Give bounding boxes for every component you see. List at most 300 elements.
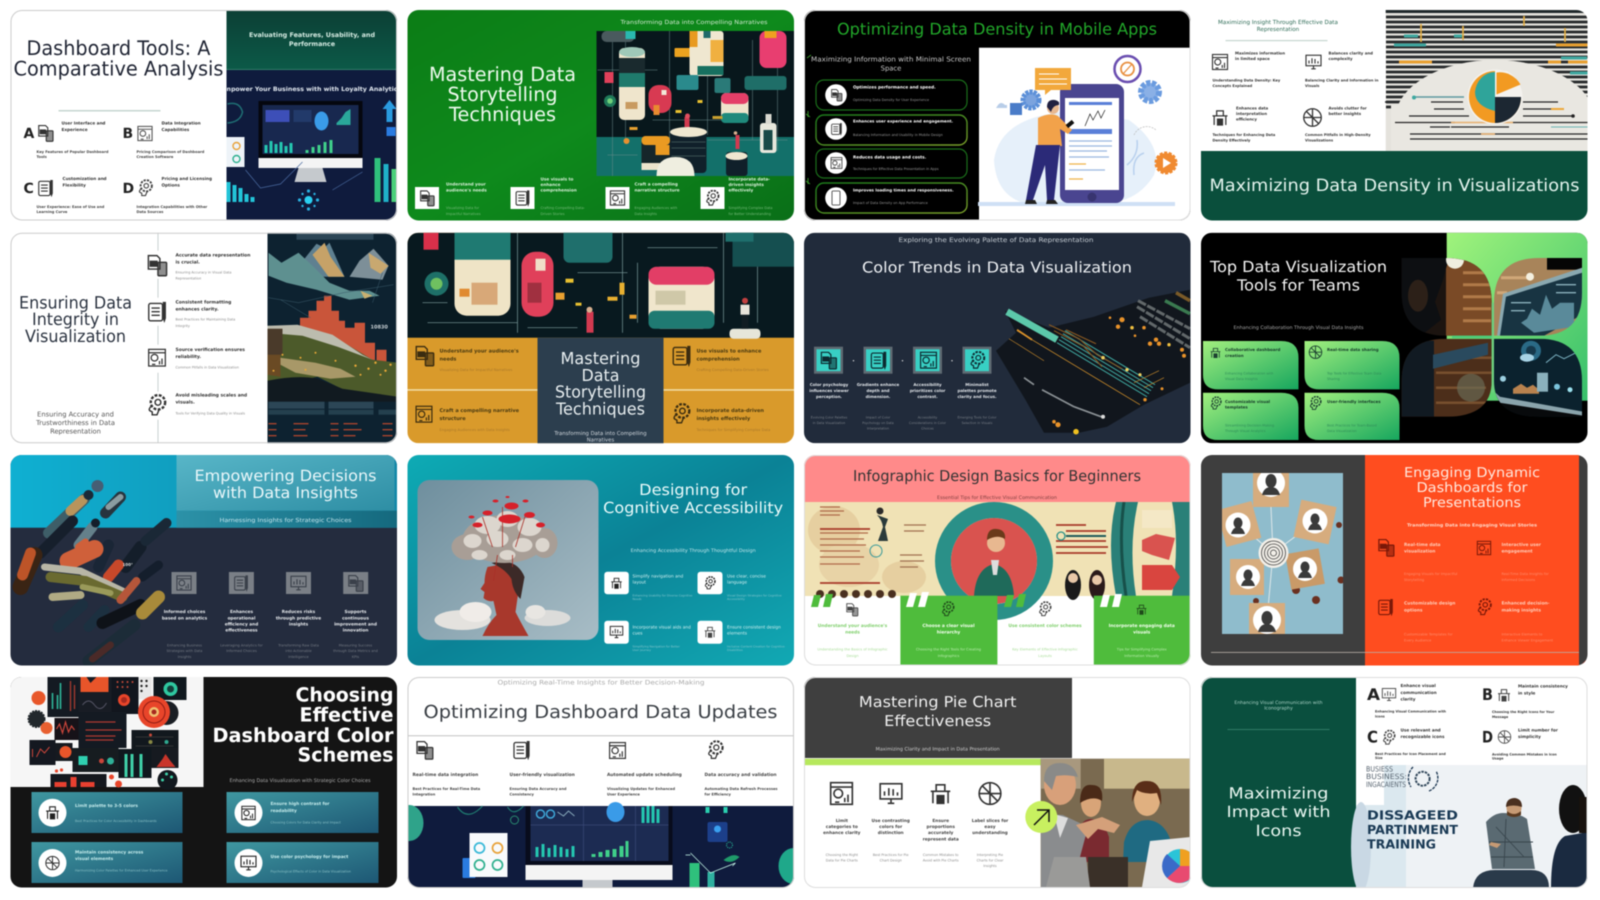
features grid: communication [1400, 690, 1437, 695]
pie chart tips: Charts for Clear [977, 858, 1004, 862]
title: Techniques [448, 103, 556, 126]
four decisions: efficiency and [225, 622, 258, 628]
pie chart tips: distinction [878, 830, 904, 836]
image: terrain data visualization: 10830 [370, 325, 388, 331]
left panel: Icons [1256, 822, 1302, 840]
feature row: Use visuals to [540, 176, 574, 182]
list of benefits [816, 80, 967, 213]
list of benefits: Optimizing Data Density for User Experience [853, 98, 929, 102]
four color tips: Best Practices for Color Accessibility in Dashboards [75, 819, 157, 823]
features grid: complexity [1328, 56, 1353, 61]
features grid: Data Integration [162, 120, 201, 126]
title: Optimizing Data Density in Mobile Apps [837, 20, 1157, 38]
process steps: for Efficiency [704, 792, 732, 796]
pie chart tips: categories to [826, 824, 858, 830]
four feature tiles: Crafting Compelling Data-Driven Stories [696, 368, 769, 372]
four feature tiles: Use visuals to enhance [696, 349, 762, 355]
title panel [176, 455, 398, 528]
features grid: B [122, 126, 133, 142]
four color tips: Use color psychology for impact [270, 854, 348, 860]
panel: Dashboard Color Schemes card [10, 677, 397, 888]
accessibility tips: Inclusive Content Creation for Cognitive [727, 644, 785, 648]
features grid: Customization and [62, 176, 107, 181]
process steps: User-friendly visualization [510, 772, 575, 778]
image: retro infographic [804, 502, 1191, 612]
pie chart tips: understanding [972, 830, 1008, 836]
image: dark ribbon chart [996, 290, 1190, 434]
four trends: Gradients enhance [857, 382, 900, 387]
pie chart tips: Choosing the Right [826, 853, 859, 857]
four decisions: innovation [343, 628, 368, 634]
subtitle: Maximizing Information with Minimal Screen [811, 56, 971, 64]
tool cards: Customizable visual [1225, 399, 1271, 404]
pie chart tips: Ensure [932, 818, 949, 824]
subtitle [35, 411, 115, 436]
left panel: Impact with [1226, 803, 1330, 821]
title: Top Data Visualization [1209, 258, 1387, 276]
four decisions: insights [289, 622, 309, 628]
features grid: Pricing and Licensing [162, 176, 212, 181]
panel: Cognitive Accessibility card [408, 455, 794, 666]
feature row: driven insights [728, 182, 764, 187]
tool cards: Streamlining Decision-Making [1225, 424, 1274, 428]
feature grid: engagement [1502, 548, 1533, 554]
panel: Mastering Data Storytelling green card [408, 10, 794, 220]
four color tips: readability [270, 808, 297, 814]
feature grid: Customizable Templates for [1404, 632, 1453, 636]
four trends: contrast. [917, 394, 938, 399]
pie chart tips: Use contrasting [872, 818, 910, 824]
process steps: Consistency [510, 792, 535, 796]
features grid: simplicity [1518, 734, 1541, 739]
accessibility tips: Incorporate visual aids and [632, 624, 691, 630]
title block: Mastering [560, 349, 640, 368]
process steps: Automating Data Refresh Processes [704, 787, 778, 791]
checklist: enhances clarity. [176, 307, 219, 313]
arrow badge [1025, 801, 1057, 833]
subtitle: Exploring the Evolving Palette of Data Representation [898, 237, 1094, 244]
features grid: Experience [62, 127, 88, 132]
subtitle: Maximizing Insight Through Effective Data [1218, 19, 1338, 26]
list of benefits: Impact of Data Density on App Performance [853, 201, 928, 205]
four trends: Accessibility [918, 416, 937, 420]
four decisions: effectiveness [225, 628, 258, 634]
four color tips: Choosing Colors for Data Clarity and Impact [270, 820, 341, 824]
four decisions: Informed choices [164, 609, 206, 615]
four decisions: Transforming Raw Data [277, 644, 319, 648]
four decisions: KPIs [352, 655, 359, 659]
feature row: for Better Understanding [728, 212, 771, 216]
features grid: D [1482, 728, 1493, 746]
features grid: Visualizations [1305, 138, 1333, 142]
four tips with quote marks: Understanding the Basics of Infographic [817, 648, 888, 652]
pie chart tips: Insights [983, 864, 997, 868]
panel: Maximizing Impact with Icons card [1201, 677, 1588, 892]
left panel [1201, 677, 1356, 888]
four decisions: Measuring Success [339, 644, 372, 648]
features grid: in style [1518, 690, 1536, 696]
features grid: Avoids clutter for [1328, 106, 1367, 110]
four trends: Evolving Color Palettes [811, 416, 848, 420]
tool cards: Through Visual Analytics [1224, 429, 1266, 433]
process steps: Ensuring Data Accuracy and [510, 787, 567, 791]
four trends: in Data Visualization [813, 421, 845, 425]
accessibility tips: User Journey [632, 648, 651, 652]
title [1404, 465, 1540, 511]
image: cloud head [418, 480, 598, 640]
image: dashboard monitor: npower Your Business with with Loyalty Analytic [226, 86, 398, 93]
image: training photo with banner text: PARTINMENT [1367, 822, 1458, 837]
panel: Dashboard Data Updates card [396, 677, 808, 888]
title block: Narratives [587, 437, 614, 444]
panel: right header [226, 10, 398, 70]
image: training photo with banner text: BUSINESS: [1366, 772, 1407, 781]
four trends: Emerging Tools for Color [958, 416, 997, 420]
checklist: is crucial. [176, 260, 200, 266]
four tips with quote marks: Key Elements of Effective Infographic [1012, 648, 1078, 652]
feature row: Understand your [446, 182, 487, 186]
four trends: Accessibility [913, 382, 942, 387]
feature grid: visualization [1404, 548, 1435, 554]
four tips with quote marks: Understand your audience's [818, 623, 888, 629]
checklist [144, 251, 250, 420]
panel: Infographic Design Basics card [804, 455, 1191, 666]
title: Presentations [1423, 495, 1521, 511]
title block: Maximizing Clarity and Impact in Data Presentation [876, 746, 1000, 752]
title block [804, 677, 1072, 758]
tool cards [1203, 341, 1400, 440]
image: terrain data visualization [268, 233, 398, 444]
features grid: Enhancing Visual Communication with [1375, 710, 1447, 714]
tool cards: Enhancing Collaboration with [1225, 372, 1273, 376]
features grid: C [1367, 728, 1378, 746]
title block: Data [582, 366, 620, 385]
feature grid: Customizable design [1404, 600, 1455, 606]
tool cards: Visual Data Insights [1225, 377, 1258, 381]
subtitle: Enhancing Data Visualization with Strategic Color Choices [230, 778, 371, 784]
features grid: recognizable icons [1400, 734, 1445, 739]
four color tips: Harmonizing Color Palettes for Enhanced User Experience [75, 868, 167, 872]
features grid [24, 120, 212, 214]
accessibility tips: Simplifying Navigation for Better [632, 644, 681, 648]
four color tips: visual elements [75, 856, 114, 862]
title band: Infographic Design Basics for Beginners [853, 467, 1141, 485]
accessibility tips: Accessibility [727, 597, 745, 601]
features grid: Balances clarity and [1328, 50, 1373, 56]
checklist: Consistent formatting [176, 300, 231, 306]
tool cards: Top Tools for Effective Team Data [1326, 372, 1381, 376]
four decisions: Insights [178, 655, 192, 659]
features grid: Best Practices for Icon Placement and [1375, 752, 1446, 756]
feature row: Impactful Narratives [446, 212, 481, 216]
four feature tiles: Engaging Audiences with Data Insights [440, 428, 510, 432]
title band [1201, 151, 1588, 221]
four decisions: through Data Metrics and [333, 649, 378, 653]
feature grid: Every Audience [1404, 638, 1431, 642]
four trends: influences viewer [809, 388, 849, 393]
title band: Essential Tips for Effective Visual Communication [937, 495, 1057, 501]
features grid: Icons [1375, 714, 1385, 718]
accessibility tips: Use clear, concise [727, 573, 766, 579]
four trends: dimension. [866, 394, 891, 399]
features grid: Pricing Comparison of Dashboard [136, 150, 205, 154]
four feature tiles: Techniques for Simplifying Complex Data [696, 428, 770, 432]
features grid: efficiency [1236, 116, 1257, 122]
image: team meeting photo [1041, 759, 1197, 888]
accessibility tips: cues [632, 631, 643, 636]
image: connected people nodes [1217, 465, 1344, 639]
image: data cylinders [596, 31, 794, 176]
four decisions: Strategies with Data [167, 649, 202, 653]
title: Tools for Teams [1236, 277, 1360, 295]
feature grid: Informed Decisions [1502, 578, 1535, 582]
features grid: Enhances data [1236, 106, 1268, 110]
title: Dashboards for [1416, 480, 1528, 496]
accessibility tips: Visual Design Strategies for Cognitive [727, 593, 782, 597]
title: Integrity in [32, 310, 119, 330]
accessibility tips: Enhancing Usability for Diverse Cognitive [632, 593, 693, 597]
four color tips: Ensure high contrast for [270, 801, 330, 807]
feature grid: Interactive Elements to [1502, 632, 1542, 636]
process steps: Best Practices for Real-Time Data [412, 787, 481, 791]
four feature tiles: Understand your audience's [440, 349, 519, 355]
subtitle: Representation [50, 428, 101, 436]
pie chart tips: Avoid with Pie Charts [923, 858, 959, 862]
tool cards: User-friendly interfaces [1327, 399, 1381, 404]
feature row: comprehension [540, 188, 577, 192]
image: cylinders close-up [406, 232, 795, 340]
four tips with quote marks: Tips for Simplifying Complex [1116, 648, 1167, 652]
title band: Maximizing Data Density in Visualizations [1210, 176, 1580, 196]
subtitle: Enhancing Accessibility Through Thoughtful Design [631, 548, 756, 554]
title block: Techniques [555, 400, 645, 419]
subtitle: Ensuring Accuracy and [37, 411, 114, 419]
four trends: Psychology on Data [862, 421, 894, 425]
features grid: Learning Curve [36, 210, 68, 214]
panel: Empowering Decisions card [10, 455, 398, 666]
pie chart tips: Interpreting Pie [977, 853, 1003, 857]
title panel: Harnessing Insights for Strategic Choices [220, 517, 352, 524]
pie chart tips: Best Practices for Pie [873, 853, 909, 857]
panel: Top Data Visualization Tools card [1201, 233, 1588, 443]
title [20, 294, 132, 343]
features grid: Tools [36, 155, 47, 159]
accessibility tips: layout [632, 579, 646, 585]
four tips with quote marks: Infographics [938, 654, 959, 658]
four decisions: Enhancing Business [167, 644, 202, 648]
feature grid: Enhanced decision- [1502, 600, 1550, 606]
title: Designing for [639, 481, 748, 499]
pie chart tips [823, 783, 1009, 868]
panel: Dashboard Tools card [10, 10, 398, 221]
features grid: D [122, 181, 134, 197]
image: training photo with banner text [1351, 764, 1588, 892]
title: Engaging Dynamic [1404, 465, 1540, 481]
subtitle: Enhancing Collaboration Through Visual Data Insights [1234, 325, 1364, 331]
feature grid: Storytelling [1404, 578, 1424, 582]
features grid: Visuals [1305, 84, 1319, 88]
features grid: Balancing Clarity and Information in [1305, 78, 1379, 82]
list of benefits: Improves loading times and responsiveness. [853, 188, 954, 192]
illustration: person with phone [978, 48, 1191, 221]
feature row: enhance [540, 182, 561, 187]
feature grid: Real-time data [1404, 542, 1441, 548]
features grid: interpretation [1236, 111, 1267, 116]
checklist: Best Practices for Maintaining Data [176, 318, 235, 322]
checklist: visuals. [176, 400, 195, 406]
features grid: Limit number for [1518, 728, 1559, 732]
four tips with quote marks: Design [846, 654, 859, 658]
features grid: Enhance visual [1400, 683, 1436, 688]
four tips with quote marks: needs [845, 630, 860, 636]
feature row: Craft a compelling [634, 182, 678, 186]
list of benefits: Optimizes performance and speed. [853, 84, 936, 90]
tool cards: Best Practices for Team-Based [1327, 424, 1377, 428]
panel: Ensuring Data Integrity card [10, 233, 398, 444]
subtitle: Space [881, 64, 901, 72]
features grid: Common Pitfalls in High-Density [1305, 133, 1371, 137]
features grid: Density Effectively [1212, 138, 1251, 142]
list of benefits: Reduces data usage and costs. [853, 154, 927, 160]
title panel: Empowering Decisions [194, 467, 376, 485]
tool cards: Real-time data sharing [1327, 347, 1379, 352]
four tips with quote marks [811, 592, 1191, 666]
features grid: Techniques for Enhancing Data [1212, 133, 1276, 137]
process steps [412, 741, 778, 796]
four trends: prioritizes color [910, 388, 945, 393]
feature grid: making insights [1502, 608, 1541, 614]
accessibility tips: Simplify navigation and [632, 573, 683, 579]
title: Effective [300, 704, 394, 726]
pie chart tips: Data for Pie Charts [826, 858, 858, 862]
left panel: Iconography [1264, 706, 1293, 712]
list of benefits: Balancing Information and Usability in Mobile Design [853, 133, 943, 137]
subtitle: Representation [1257, 26, 1300, 33]
feature grid: Engaging Visuals for Impactful [1404, 572, 1457, 576]
image: pie chart with data stripes [1384, 9, 1588, 152]
features grid: Creation Software [136, 155, 174, 159]
pie chart tips: represent data [923, 836, 959, 842]
accessibility tips: Disabilities [727, 648, 743, 652]
features grid: Integration Capabilities with Other [136, 205, 208, 209]
four feature tiles: comprehension [696, 357, 740, 363]
title panel: with Data Insights [213, 484, 358, 502]
features grid: Size [1375, 756, 1383, 760]
features grid: in limited space [1235, 56, 1270, 61]
four color tips: Limit palette to 3-5 colors [75, 803, 138, 809]
list of benefits: Enhances user experience and engagement. [853, 118, 954, 124]
title: Optimizing Dashboard Data Updates [424, 702, 778, 723]
checklist: Tools for Verifying Data Quality in Visuals [174, 412, 245, 416]
four trends: Color psychology [810, 382, 849, 387]
panel: Maximizing Data Density card [1201, 10, 1600, 221]
pie chart tips: enhance clarity [823, 830, 861, 836]
title: Color Trends in Data Visualization [862, 259, 1132, 277]
process steps: Integration [412, 792, 436, 796]
feature grid: Enhance Viewer Engagement [1502, 638, 1554, 642]
pie chart tips: colors for [879, 824, 903, 830]
checklist: Source verification ensures [176, 347, 245, 353]
four trends: clarity and focus. [957, 394, 997, 399]
features grid: clarity [1400, 696, 1416, 702]
process steps: Data accuracy and validation [704, 772, 777, 778]
four trends [809, 347, 997, 431]
panel: Pie Chart Effectiveness card [804, 677, 1197, 888]
pie chart tips: Chart Design [880, 858, 902, 862]
four decisions: Enhances [230, 609, 253, 615]
features grid: Avoiding Common Mistakes in Icon [1492, 752, 1557, 756]
title [429, 63, 576, 126]
process steps: Real-time data integration [412, 772, 478, 778]
process steps: User Experience [607, 792, 640, 796]
features grid: User Experience: Ease of Use and [36, 205, 105, 209]
panel: right header: Evaluating Features, Usability, and [249, 31, 375, 39]
checklist: Representation [176, 277, 201, 281]
title block: Mastering Pie Chart [859, 693, 1017, 711]
title: Cognitive Accessibility [603, 499, 783, 517]
four decisions: continuous [342, 616, 369, 622]
four tips with quote marks: Use consistent color schemes [1008, 623, 1082, 629]
tool cards: Data Visualization [1327, 429, 1357, 433]
image: training photo with banner text: TRAINING [1367, 836, 1436, 852]
subtitle [811, 56, 971, 72]
image: training photo with banner text: BUSIESS [1366, 764, 1393, 774]
four decisions: Informed Choices [226, 649, 257, 653]
features grid: A [1367, 685, 1381, 704]
four tips with quote marks: Choosing the Right Tools for Creating [916, 648, 981, 652]
title: Storytelling [448, 83, 558, 106]
process steps: Automated update scheduling [607, 772, 682, 778]
process steps: Visualizing Updates for Enhanced [607, 787, 675, 791]
four decisions: operational [228, 616, 256, 622]
features grid: Data Sources [136, 210, 163, 214]
title [1209, 260, 1387, 292]
title: Schemes [298, 744, 394, 766]
title: Visualization [25, 327, 126, 347]
features grid: A [24, 126, 34, 142]
checklist: Accurate data representation [176, 253, 250, 259]
features grid [1212, 50, 1379, 142]
four tips with quote marks: Incorporate engaging data [1109, 623, 1175, 629]
features grid: Key Features of Popular Dashboard [36, 150, 109, 154]
panel: right header: Performance [289, 40, 336, 48]
checklist: Avoid misleading scales and [176, 393, 247, 399]
four trends: Impact of Color [866, 416, 891, 420]
four trends: palettes promote [957, 388, 997, 393]
four decisions: through predictive [276, 616, 321, 622]
feature grid: Real-Time Data Insights for [1502, 572, 1549, 576]
four decisions: Reduces risks [282, 609, 316, 615]
features grid: Message [1492, 715, 1509, 719]
panel: Color Trends card [804, 233, 1190, 443]
four trends: Selection in Visuals [962, 421, 993, 425]
checklist: Integrity [176, 324, 190, 328]
four feature tiles: Incorporate data-driven [696, 408, 764, 414]
image: diagonal landscape strips [20, 480, 166, 661]
list of benefits: Techniques for Effective Data Presentation in Apps [852, 167, 939, 171]
feature grid [1379, 540, 1554, 642]
title: Mastering Data [429, 63, 576, 86]
feature grid: options [1404, 608, 1423, 614]
four decisions: Leveraging Analytics for [220, 644, 263, 648]
four decisions: improvement and [334, 622, 377, 628]
left panel: Maximizing [1228, 784, 1328, 802]
four decisions [162, 572, 378, 659]
panel: Mastering Data Storytelling amber card [408, 218, 794, 444]
title: Dashboard Tools: A [26, 36, 211, 60]
image: training photo with banner text: DISSAGEED [1367, 808, 1458, 822]
subtitle: Transforming Data into Engaging Visual Stories [1407, 522, 1537, 528]
